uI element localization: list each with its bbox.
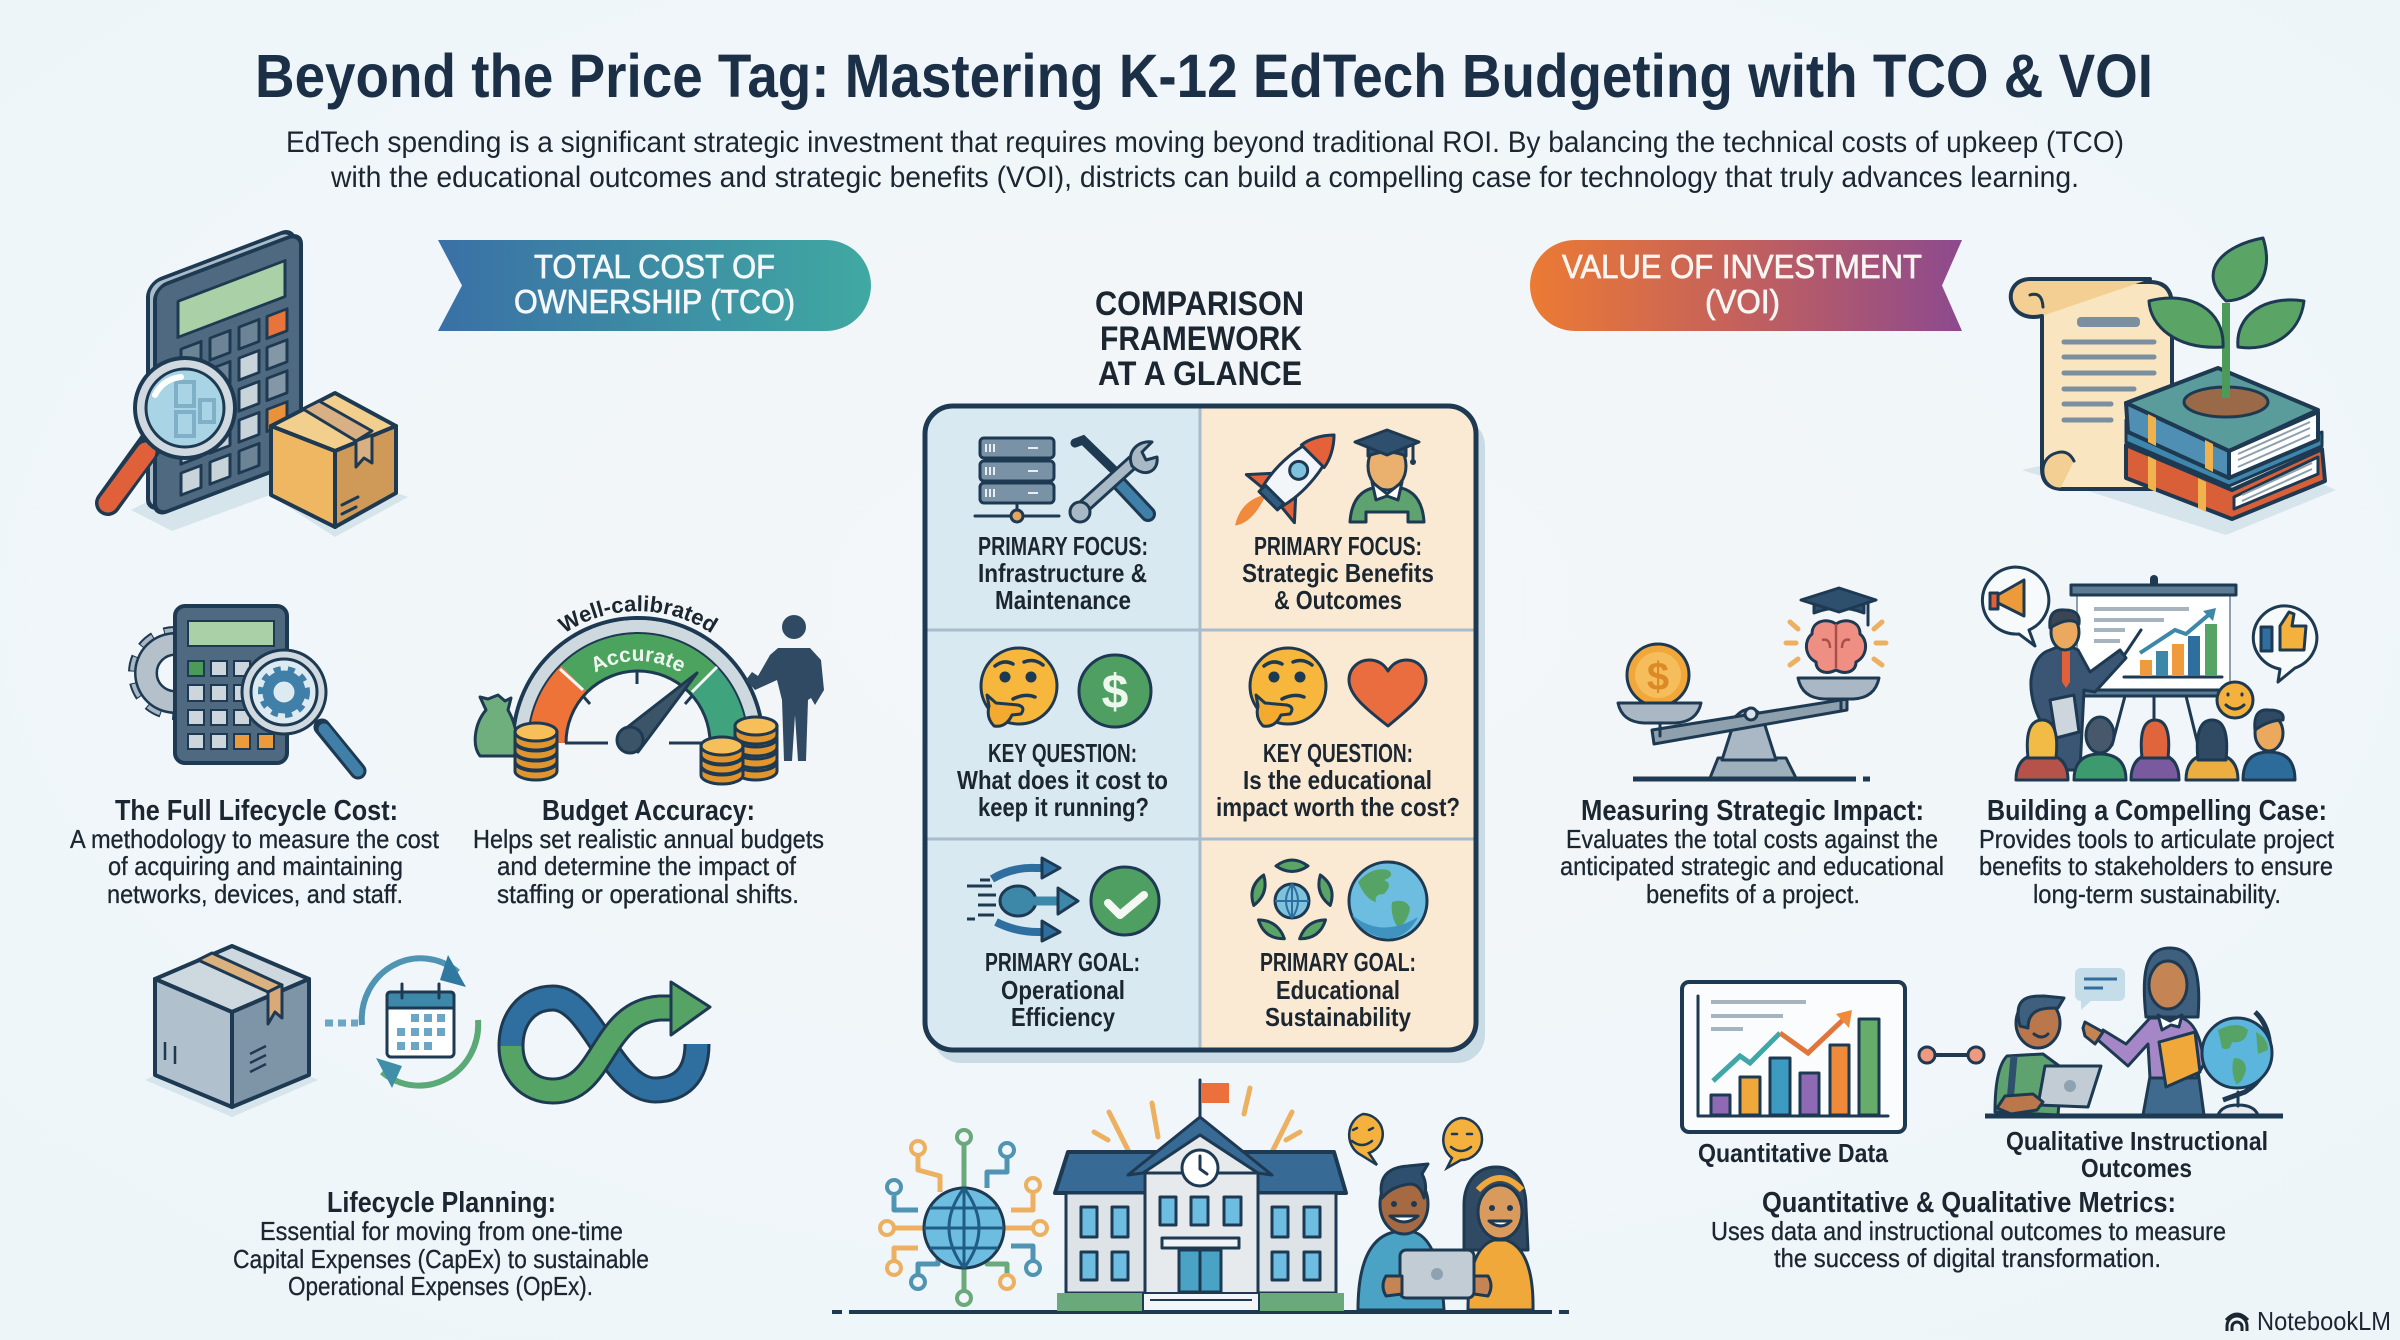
icon: scroll, books and seedling (2011, 238, 2336, 535)
icon: thinking face (1250, 648, 1326, 726)
text: lifecycle planning: Lifecycle Planning: (327, 1187, 556, 1219)
icon: school building (1055, 1080, 1346, 1311)
cell: VOI key question (1216, 648, 1460, 822)
cell: VOI key question: impact worth the cost? (1216, 792, 1460, 822)
cell: TCO primary goal (967, 858, 1159, 1032)
chart: quantitative data (1682, 982, 1905, 1132)
text: lifecycle planning: Capital Expenses (CapEx) to sustainable (233, 1244, 649, 1274)
cell: VOI primary focus (1215, 411, 1434, 615)
cell: TCO primary goal: PRIMARY GOAL: (985, 947, 1140, 977)
icon: thinking face (981, 648, 1057, 726)
text: building a compelling case: long-term sustainability. (2033, 879, 2281, 909)
banner: value of investment (1530, 240, 1962, 331)
cell: TCO primary goal: Operational (1001, 975, 1125, 1005)
banner: value of investment: VALUE OF INVESTMENT (1562, 248, 1922, 285)
text: lifecycle planning: Operational Expenses (OpEx). (288, 1271, 593, 1301)
cell: VOI primary goal: Educational (1276, 975, 1400, 1005)
cell: TCO key question: What does it cost to (957, 765, 1168, 795)
text: measuring strategic impact (1560, 795, 1944, 909)
banner: total cost of ownership: TOTAL COST OF (534, 248, 775, 285)
cell: TCO primary focus: PRIMARY FOCUS: (978, 531, 1148, 561)
illustration: school, network and students (832, 1080, 1569, 1312)
text: budget accuracy: Helps set realistic annual budgets (473, 824, 824, 854)
comparison framework heading: COMPARISON (1095, 285, 1304, 323)
comparison framework heading (1095, 285, 1304, 393)
text: budget accuracy: staffing or operational shifts. (497, 879, 799, 909)
text: the full lifecycle cost: networks, devices, and staff. (107, 879, 403, 909)
text: building a compelling case (1979, 795, 2335, 909)
text: measuring strategic impact: anticipated strategic and educational (1560, 851, 1944, 881)
text: the full lifecycle cost (70, 795, 440, 909)
panel: comparison table (925, 406, 1485, 1063)
cell: VOI primary focus: & Outcomes (1274, 585, 1402, 615)
icon: graduate (1350, 430, 1424, 522)
text: lifecycle planning (233, 1187, 649, 1301)
text: quantitative and qualitative metrics: Quantitative & Qualitative Metrics: (1762, 1187, 2176, 1219)
label: quantitative data: Quantitative Data (1698, 1138, 1888, 1168)
cell: VOI primary goal: PRIMARY GOAL: (1260, 947, 1416, 977)
gauge label: accurate: Accurate (594, 650, 684, 672)
cell: TCO key question: KEY QUESTION: (988, 738, 1137, 768)
connector between data and outcomes (1919, 1047, 1984, 1063)
label: qualitative instructional outcomes: Outcomes (2081, 1153, 2192, 1183)
icon: network globe (880, 1130, 1047, 1305)
icon: earth (1349, 862, 1427, 940)
icon: heart (1349, 660, 1426, 726)
subtitle text block: EdTech spending is a significant strategic investment that requires moving beyond traditional ROI. By balancing the technical costs of upkeep (TCO) (286, 126, 2124, 159)
cell: TCO primary focus (975, 438, 1157, 615)
watermark: NotebookLM: NotebookLM (2257, 1306, 2391, 1336)
cell: TCO primary focus: Maintenance (995, 585, 1131, 615)
icon: boy and girl with tablet (1358, 1164, 1533, 1310)
subtitle text block: with the educational outcomes and strategic benefits (VOI), districts can build a compelling case for technology that truly advances learning. (330, 161, 2079, 194)
cell: VOI primary focus: PRIMARY FOCUS: (1254, 531, 1422, 561)
icon: check mark (1091, 867, 1159, 935)
text: the full lifecycle cost: of acquiring and maintaining (108, 851, 403, 881)
text: measuring strategic impact: Evaluates the total costs against the (1566, 824, 1938, 854)
cell: TCO key question: keep it running? (978, 792, 1149, 822)
icon: calculator, magnifier and box (108, 228, 408, 537)
cell: VOI primary goal: Sustainability (1265, 1002, 1411, 1032)
icon: student, teacher and globe (1985, 948, 2283, 1116)
text: building a compelling case: Provides tools to articulate project (1979, 824, 2335, 854)
text: quantitative and qualitative metrics: Uses data and instructional outcomes to measure (1711, 1216, 2226, 1246)
banner: value of investment: (VOI) (1705, 283, 1780, 320)
icon: balance scale with coin and brain (1618, 588, 1886, 779)
label: qualitative instructional outcomes (2006, 1126, 2268, 1183)
icon: accuracy gauge with coins and person (474, 595, 824, 786)
icon: efficiency arrows (967, 858, 1078, 941)
icon: dollar coin (1079, 655, 1151, 727)
text: quantitative and qualitative metrics: the success of digital transformation. (1774, 1243, 2161, 1273)
icon: rocket (1215, 411, 1358, 554)
cell: TCO key question (957, 648, 1168, 822)
label: qualitative instructional outcomes: Qualitative Instructional (2006, 1126, 2268, 1156)
icon: wrench and screwdriver (1070, 440, 1157, 522)
text: building a compelling case: Building a Compelling Case: (1987, 795, 2327, 827)
text: quantitative and qualitative metrics (1711, 1187, 2226, 1273)
icon: balance scale with coin and brain: $ (1647, 655, 1669, 699)
subtitle text block (286, 126, 2124, 194)
text: building a compelling case: benefits to stakeholders to ensure (1979, 851, 2333, 881)
icon: leaves around globe (1248, 860, 1336, 944)
icon: presenter with chart and audience (1982, 567, 2317, 780)
text: budget accuracy: Budget Accuracy: (542, 795, 755, 827)
cell: VOI key question: KEY QUESTION: (1263, 738, 1413, 768)
gauge label: well-calibrated: Well-calibrated (556, 595, 719, 633)
text: lifecycle planning: Essential for moving from one-time (260, 1216, 623, 1246)
icon: dollar coin: $ (1102, 666, 1129, 719)
text: measuring strategic impact: Measuring Strategic Impact: (1581, 795, 1924, 827)
text: budget accuracy: and determine the impact of (497, 851, 797, 881)
cell: VOI primary goal (1248, 860, 1427, 1032)
title: Beyond the Price Tag: Mastering K-12 EdTech Budgeting with TCO & VOI (255, 42, 2153, 110)
text: the full lifecycle cost: The Full Lifecycle Cost: (115, 795, 398, 827)
cell: TCO primary goal: Efficiency (1011, 1002, 1115, 1032)
banner: total cost of ownership: OWNERSHIP (TCO) (514, 283, 795, 320)
comparison framework heading: AT A GLANCE (1098, 355, 1302, 393)
icon: smiling chat bubbles (1349, 1114, 1482, 1168)
text: budget accuracy (473, 795, 824, 909)
banner: total cost of ownership (438, 240, 871, 331)
icon: calculator with gear and magnifier (134, 606, 358, 771)
icon: server rack (975, 438, 1059, 522)
cell: VOI key question: Is the educational (1243, 765, 1432, 795)
icon: box, calendar and infinity arrow (145, 946, 710, 1117)
cell: TCO primary focus: Infrastructure & (978, 558, 1147, 588)
icon: ground line (832, 1310, 1569, 1314)
cell: VOI primary focus: Strategic Benefits (1242, 558, 1434, 588)
text: measuring strategic impact: benefits of a project. (1646, 879, 1860, 909)
comparison framework heading: FRAMEWORK (1100, 320, 1302, 358)
text: the full lifecycle cost: A methodology to measure the cost (70, 824, 440, 854)
